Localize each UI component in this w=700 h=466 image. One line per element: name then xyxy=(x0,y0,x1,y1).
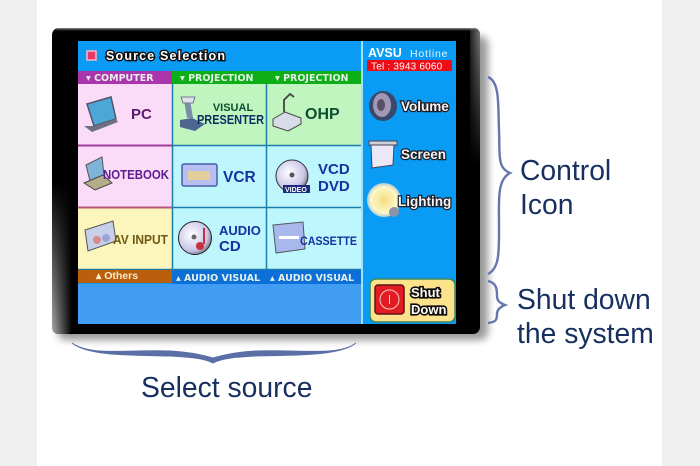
screen xyxy=(78,41,456,324)
button: VCD DVD: VIDEO xyxy=(285,187,307,194)
button: AV input xyxy=(78,206,172,270)
label: control icon xyxy=(520,154,611,220)
button: VCD DVD: VCD xyxy=(318,161,350,178)
button: PC xyxy=(78,84,172,145)
button: OHP xyxy=(267,84,361,145)
shut down label xyxy=(411,285,446,317)
bracket: control icon xyxy=(488,77,510,274)
button: visual presenter: VISUAL xyxy=(213,102,253,114)
hotline heading xyxy=(368,46,448,60)
button: PC: PC xyxy=(131,106,152,123)
lighting label: Lighting xyxy=(398,194,451,209)
label: shut down the system xyxy=(517,283,654,349)
shut down button xyxy=(370,279,455,322)
button: notebook: NOTEBOOK xyxy=(103,168,169,182)
icon: power xyxy=(375,285,404,314)
button: VCD DVD xyxy=(267,146,361,208)
bezel shadow xyxy=(58,36,488,340)
button: notebook xyxy=(78,144,172,208)
button: cassette: CASSETTE xyxy=(300,234,357,248)
hotline heading: Hotline xyxy=(410,48,448,60)
bezel xyxy=(52,28,480,334)
button: OHP: OHP xyxy=(305,106,340,123)
icon: volume speaker xyxy=(369,91,397,121)
button: audio CD: CD xyxy=(219,238,241,255)
button: audio CD xyxy=(173,208,266,270)
category footer: others xyxy=(78,270,172,283)
button: visual presenter: PRESENTER xyxy=(197,113,264,127)
category header: projection xyxy=(172,71,362,84)
panel: controls sidebar xyxy=(367,46,455,322)
label: select source: Select source xyxy=(141,371,312,403)
category footer: audio visual: ▴ AUDIO VISUAL xyxy=(270,273,354,284)
hotline heading: AVSU xyxy=(368,46,402,60)
label: shut down the system: Shut down xyxy=(517,283,651,315)
shut down label: Down xyxy=(411,302,446,317)
category header: projection: ▾ PROJECTION xyxy=(180,73,254,84)
icon: projection screen xyxy=(369,141,397,168)
screen label: Screen xyxy=(401,147,446,162)
telephone number: Tel : 3943 6060 xyxy=(371,62,443,72)
category footer: audio visual xyxy=(172,270,362,284)
button: VCR xyxy=(173,146,266,208)
grid lines xyxy=(78,84,361,270)
volume label: Volume xyxy=(401,99,449,114)
label: control icon: Control xyxy=(520,154,611,186)
divider xyxy=(361,41,363,324)
touch panel device xyxy=(52,28,488,340)
icon: light bulb xyxy=(367,183,401,217)
button: audio CD: AUDIO xyxy=(219,223,261,238)
empty blue strip xyxy=(78,284,362,324)
button: AV input: AV INPUT xyxy=(113,233,168,247)
category footer: audio visual: ▴ AUDIO VISUAL xyxy=(176,273,260,284)
bracket: shut down xyxy=(488,281,505,323)
shut down label: Shut xyxy=(411,285,441,300)
bracket: select source xyxy=(72,343,356,363)
panel: source selection xyxy=(78,49,362,324)
button: visual presenter xyxy=(173,84,266,145)
label: shut down the system: the system xyxy=(517,317,654,349)
button: VCR: VCR xyxy=(223,169,256,186)
category header: projection: ▾ PROJECTION xyxy=(275,73,349,84)
category footer: others: ▴ Others xyxy=(95,270,138,282)
button: VCD DVD: DVD xyxy=(318,178,350,195)
source selection heading: Source Selection xyxy=(106,49,225,63)
button: cassette xyxy=(267,208,361,270)
category header: computer: ▾ COMPUTER xyxy=(86,73,154,84)
label: control icon: Icon xyxy=(520,188,574,220)
category header: computer xyxy=(78,71,172,84)
